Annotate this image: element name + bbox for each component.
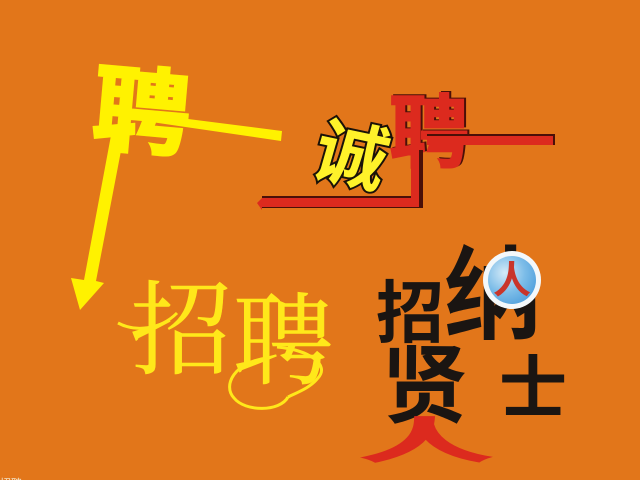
icon: blue ball with red 人 [483, 251, 541, 309]
yellow recruit mark with arrow [71, 57, 282, 310]
thin yellow 招聘 lettering [118, 276, 333, 408]
decorative swash strokes [118, 313, 322, 408]
icon: blue ball with red 人: 人 [493, 260, 531, 302]
text: 贤: 贤 [382, 339, 468, 435]
black 招纳贤士 slogan [358, 239, 567, 469]
red stretched 人 beneath: 人 [358, 413, 494, 469]
arrow: red L-shaped arrow [257, 134, 555, 210]
arrow: yellow downward arrow [71, 130, 125, 310]
slanted yellow 诚 character: 诚 [305, 111, 397, 203]
heading: 聘: 聘 [233, 287, 333, 398]
icon: yellow horizontal stroke [131, 112, 282, 141]
heading: red 聘 with shadow: 聘 [391, 88, 471, 177]
red recruit mark with arrow [257, 88, 555, 210]
heading: 招: 招 [130, 276, 232, 389]
text: 纳: 纳 [444, 239, 542, 353]
heading: yellow 聘: 聘 [88, 57, 195, 170]
text: 士: 士 [499, 351, 567, 427]
heading: red 聘 with shadow: 聘 [389, 89, 469, 178]
text: 招: 招 [376, 276, 444, 352]
